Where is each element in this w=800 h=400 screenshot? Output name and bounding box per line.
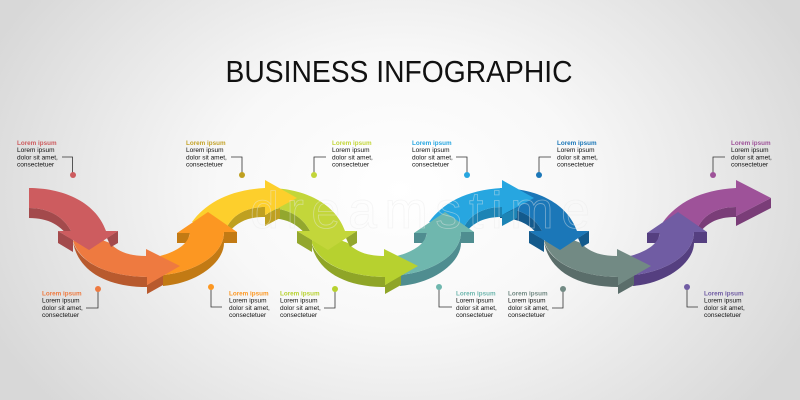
callout 11: purple: Lorem ipsum — [704, 290, 744, 298]
callout 11: purple: dolor sit amet, — [704, 305, 745, 312]
callout 9: dark blue — [536, 140, 598, 178]
callout 9: dark blue: consectetuer — [557, 162, 595, 168]
callout 2: orange: Lorem ipsum — [42, 290, 82, 298]
callout 7: teal: consectetuer — [456, 312, 494, 319]
callout 2: orange: consectetuer — [42, 312, 80, 319]
callout 3: amber — [208, 284, 270, 319]
callout 6: green: Lorem ipsum — [280, 290, 320, 298]
arrow 2: orange — [73, 235, 180, 294]
callout 5: lime — [311, 140, 373, 178]
callout 9: dark blue: dolor sit amet, — [557, 154, 598, 162]
callout 8: light blue: Lorem ipsum — [412, 140, 452, 147]
callout 9: dark blue: Lorem ipsum — [557, 147, 595, 154]
callout 12: magenta: Lorem ipsum — [731, 140, 771, 147]
arrow 3: amber — [160, 212, 237, 286]
callout 11: purple: Lorem ipsum — [704, 298, 742, 304]
callout 12: magenta — [710, 140, 772, 178]
arrow 4: yellow — [192, 180, 297, 232]
callout 7: teal — [436, 284, 497, 319]
callout 4: yellow — [186, 140, 245, 178]
callout 11: purple: consectetuer — [704, 312, 742, 319]
arrow 6: green — [311, 235, 418, 294]
callout 4: yellow: Lorem ipsum — [186, 147, 224, 154]
callout 8: light blue — [412, 140, 470, 178]
callout 11: purple — [684, 284, 745, 319]
callout 5: lime: Lorem ipsum — [332, 147, 370, 154]
arrow 7: teal — [397, 212, 474, 286]
watermark: dreamstime — [250, 182, 590, 240]
arrow 10: slate grey — [544, 235, 651, 294]
callout 8: light blue: dolor sit amet, — [412, 154, 453, 162]
callout 1: red: dolor sit amet, — [17, 154, 58, 162]
callout 3: amber: Lorem ipsum — [229, 290, 269, 298]
arrow 5: lime — [268, 188, 357, 252]
callout 7: teal: dolor sit amet, — [456, 305, 497, 312]
callout 1: red — [17, 140, 76, 178]
callout 3: amber: consectetuer — [229, 312, 267, 319]
callout 10: slate grey: Lorem ipsum — [508, 290, 548, 298]
callout 5: lime: dolor sit amet, — [332, 154, 373, 162]
callout 12: magenta: Lorem ipsum — [731, 147, 769, 154]
callout 10: slate grey: consectetuer — [508, 312, 546, 319]
callout 10: slate grey: dolor sit amet, — [508, 305, 549, 312]
callout 7: teal: Lorem ipsum — [456, 298, 494, 304]
callout 6: green — [280, 286, 338, 319]
callout 1: red: Lorem ipsum — [17, 147, 55, 154]
callout 9: dark blue: Lorem ipsum — [557, 140, 597, 147]
callout 12: magenta: dolor sit amet, — [731, 154, 772, 162]
callout 2: orange — [42, 286, 101, 319]
title: BUSINESS INFOGRAPHIC — [226, 54, 572, 89]
callout 1: red: Lorem ipsum — [17, 140, 57, 147]
arrow 11: purple — [630, 212, 707, 286]
callout 8: light blue: consectetuer — [412, 162, 450, 168]
callout 5: lime: Lorem ipsum — [332, 140, 372, 147]
callout 6: green: consectetuer — [280, 312, 318, 319]
callout 3: amber: dolor sit amet, — [229, 305, 270, 312]
callout 8: light blue: Lorem ipsum — [412, 147, 450, 154]
arrow 12: magenta — [663, 180, 771, 232]
callout 6: green: dolor sit amet, — [280, 305, 321, 312]
callout 10: slate grey: Lorem ipsum — [508, 298, 546, 304]
arrow 1: red — [29, 188, 118, 252]
callout 6: green: Lorem ipsum — [280, 298, 318, 304]
callout 4: yellow: dolor sit amet, — [186, 154, 227, 162]
callout 7: teal: Lorem ipsum — [456, 290, 496, 298]
callout 3: amber: Lorem ipsum — [229, 298, 267, 304]
arrow 8: light blue — [429, 180, 534, 232]
callout 1: red: consectetuer — [17, 162, 55, 168]
callout 2: orange: dolor sit amet, — [42, 305, 83, 312]
callout 4: yellow: Lorem ipsum — [186, 140, 226, 147]
callout 12: magenta: consectetuer — [731, 162, 769, 168]
callout 5: lime: consectetuer — [332, 162, 370, 168]
callout 2: orange: Lorem ipsum — [42, 298, 80, 304]
arrow 9: dark blue — [500, 188, 589, 252]
callout 10: slate grey — [508, 286, 566, 319]
callout 4: yellow: consectetuer — [186, 162, 224, 168]
